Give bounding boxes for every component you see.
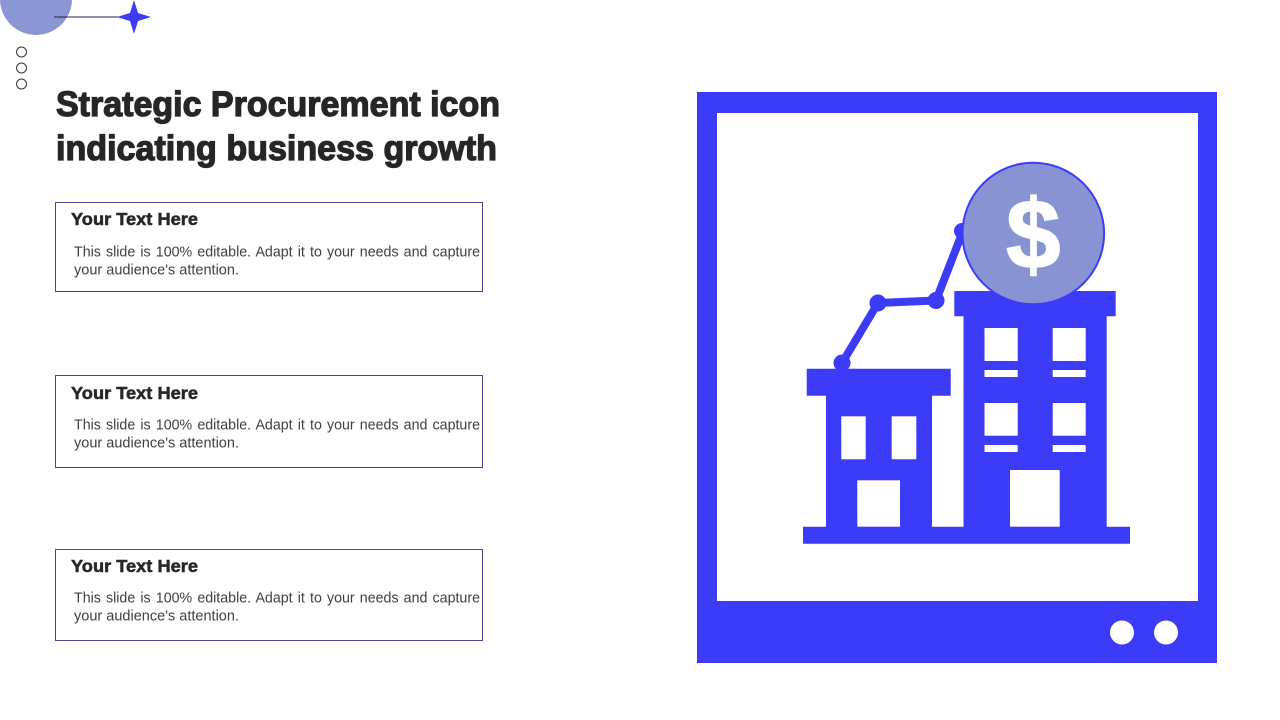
panel: text box 1 [56, 202, 482, 292]
title [56, 85, 500, 168]
panel: text box 3 [56, 550, 482, 640]
decoration: three small circles [16, 47, 26, 89]
text block: box 1: your audience's attention. [74, 262, 239, 278]
icon: buildings [803, 291, 1130, 544]
text block: box 1: This slide is 100% editable. Adapt it to your needs and capture [74, 244, 480, 260]
text block: box 1 [74, 244, 480, 278]
icon: monitor buttons [1110, 620, 1178, 644]
heading: box 3: Your Text Here [71, 556, 198, 576]
title: Strategic Procurement icon [56, 85, 500, 124]
text block: box 3: your audience's attention. [74, 608, 239, 624]
text block: box 2: This slide is 100% editable. Adapt it to your needs and capture [74, 418, 480, 434]
heading: box 1: Your Text Here [71, 209, 198, 229]
icon: dollar coin [963, 163, 1104, 304]
text block: box 2 [74, 418, 480, 452]
decoration: top-left circle, line and star [0, 0, 151, 35]
icon: dollar coin: $ [1006, 179, 1061, 289]
panel: monitor frame [697, 92, 1217, 663]
panel: text box 2 [56, 376, 482, 468]
icon: growth line [834, 223, 970, 372]
text block: box 2: your audience's attention. [74, 436, 239, 452]
text block: box 3 [74, 590, 480, 624]
heading: box 2: Your Text Here [71, 383, 198, 403]
title: indicating business growth [56, 129, 497, 168]
text block: box 3: This slide is 100% editable. Adapt it to your needs and capture [74, 590, 480, 606]
